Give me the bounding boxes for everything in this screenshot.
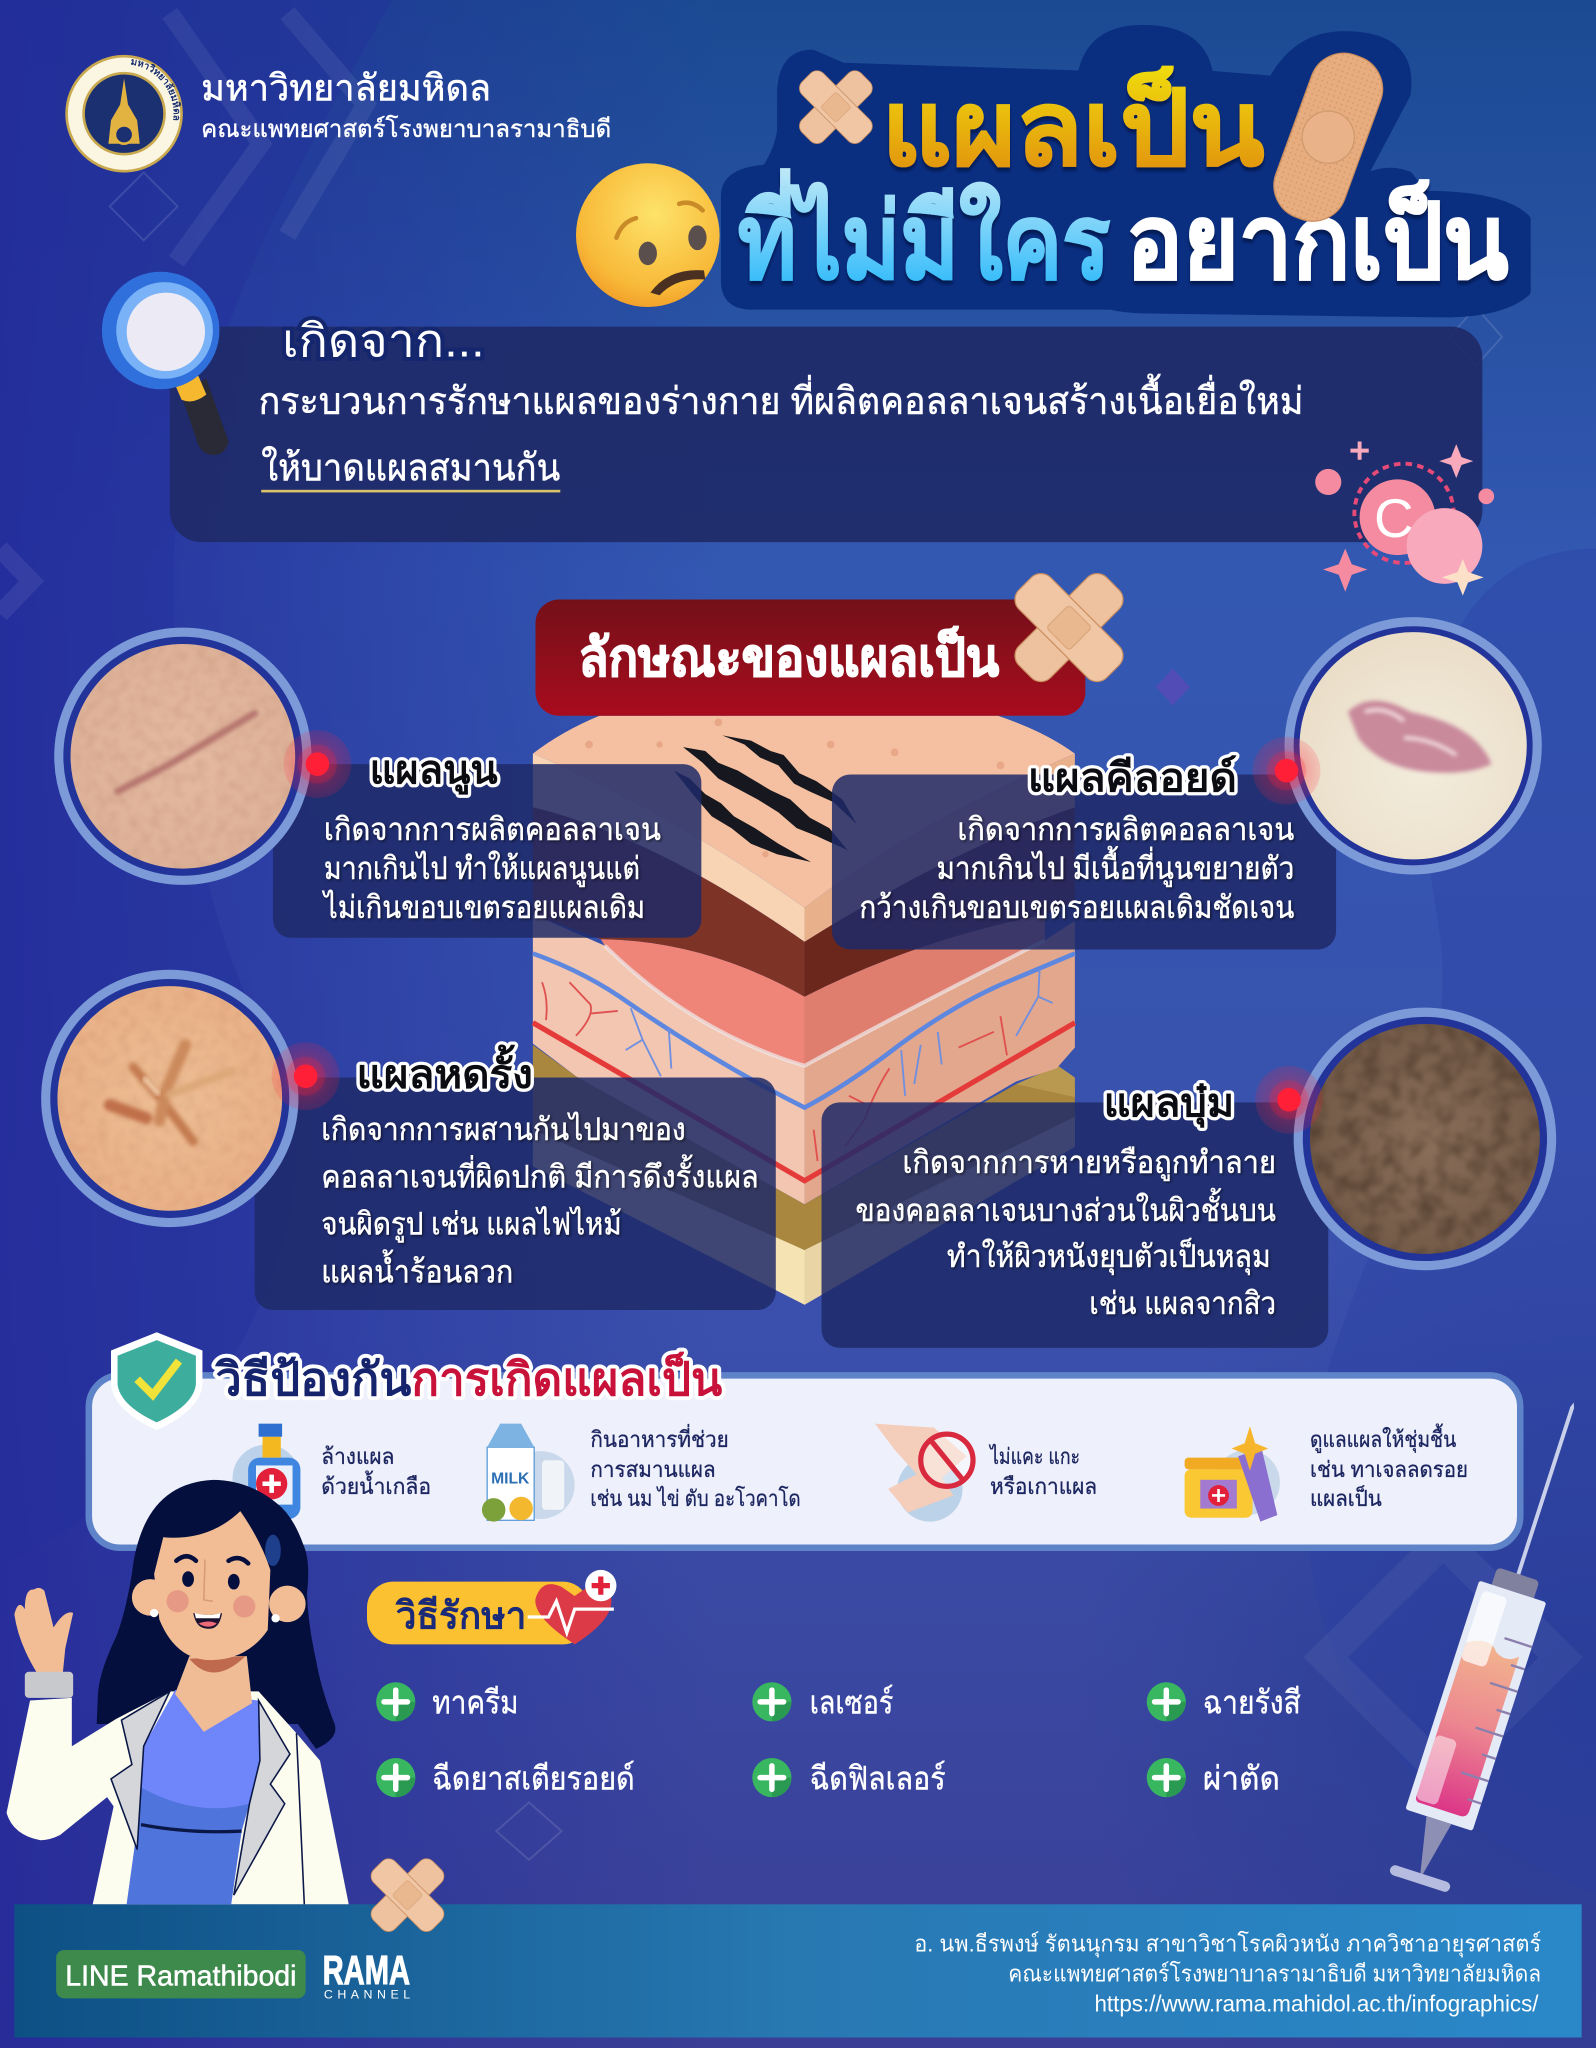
panel: contracture scar: เกิดจากการผสานกันไปมาของ xyxy=(321,1111,686,1147)
cause text line 2: ให้บาดแผลสมานกัน xyxy=(261,447,560,490)
illustration: doctor xyxy=(7,1480,349,1904)
logo: Mahidol University seal: มหาวิทยาลัยมหิดล xyxy=(131,59,181,120)
panel: contracture scar: คอลลาเจนที่ผิดปกติ มีการดึงรั้งแผล xyxy=(321,1153,759,1194)
logo: RAMA channel xyxy=(323,1947,410,2001)
footer credits: https://www.rama.mahidol.ac.th/infographics/ xyxy=(1094,1990,1539,2016)
text: moisturize: ดูแลแผลให้ชุ่มชื้น xyxy=(1310,1423,1456,1453)
hair xyxy=(97,1480,335,1749)
text: food xyxy=(590,1424,801,1511)
logo: RAMA channel: RAMA xyxy=(323,1947,410,1993)
panel: heading characteristics xyxy=(535,600,1085,716)
text: don't pick: หรือเกาแผล xyxy=(990,1474,1097,1499)
text: food: กินอาหารที่ช่วย xyxy=(590,1424,729,1452)
text: don't pick: ไม่แคะ แกะ xyxy=(988,1444,1080,1469)
icon: saline bottle xyxy=(232,1424,300,1519)
ears xyxy=(132,1579,168,1616)
logo: LINE button xyxy=(56,1950,306,1998)
treatment: cream xyxy=(376,1682,519,1721)
treatment: radiation xyxy=(1147,1682,1301,1721)
text: don't pick xyxy=(988,1444,1097,1499)
treatment: laser xyxy=(752,1682,893,1721)
panel: depressed scar: ของคอลลาเจนบางส่วนในผิวชั้นบน xyxy=(855,1187,1276,1228)
footer bar xyxy=(14,1904,1582,2037)
panel: prevention xyxy=(89,1351,1520,1548)
treatment: surgery: ผ่าตัด xyxy=(1203,1759,1280,1796)
text: moisturize: เช่น ทาเจลลดรอย xyxy=(1310,1457,1468,1482)
title line 1: แผลเป็น xyxy=(882,66,1264,188)
icon: milk and food xyxy=(482,1424,575,1522)
panel: keloid xyxy=(832,775,1336,950)
text: wash: ด้วยน้ำเกลือ xyxy=(321,1470,431,1499)
panel: depressed scar xyxy=(822,1102,1328,1348)
shirt xyxy=(127,1690,260,1904)
panel: depressed scar: เกิดจากการหายหรือถูกทำลาย xyxy=(902,1145,1276,1181)
icon: X bandage by title xyxy=(796,67,876,147)
coat xyxy=(7,1691,349,1904)
icon: X bandage bottom xyxy=(367,1855,448,1935)
panel: depressed scar: เช่น แผลจากสิว xyxy=(1089,1286,1276,1321)
heading: raised scar: แผลนูน xyxy=(370,747,498,796)
panel: depressed scar: ทำให้ผิวหนังยุบตัวเป็นหลุม xyxy=(947,1237,1271,1276)
panel: heading characteristics: ลักษณะของแผลเป็น xyxy=(579,626,999,687)
text: moisturize xyxy=(1310,1423,1468,1511)
cause text line 1: กระบวนการรักษาแผลของร่างกาย ที่ผลิตคอลลาเจนสร้างเนื้อเยื่อใหม่ xyxy=(259,373,1303,423)
heading: keloid: แผลคีลอยด์ xyxy=(1028,755,1237,801)
text: food: เช่น นม ไข่ ตับ อะโวคาโด xyxy=(590,1486,801,1511)
icon: sad face emoji xyxy=(576,163,720,307)
treatment: surgery xyxy=(1147,1758,1280,1797)
treatment heading pill: วิธีรักษา xyxy=(395,1596,526,1638)
photo: keloid xyxy=(1289,622,1537,870)
panel: keloid: กว้างเกินขอบเขตรอยแผลเดิมชัดเจน xyxy=(859,890,1294,925)
panel: keloid: มากเกินไป มีเนื้อที่นูนขยายตัว xyxy=(936,845,1294,887)
panel: contracture scar xyxy=(255,1078,776,1310)
treatment: steroid injection xyxy=(376,1758,635,1797)
icon: milk and food: MILK xyxy=(491,1471,530,1488)
treatment heading pill xyxy=(367,1582,589,1644)
lapels xyxy=(111,1691,170,1849)
title line 2 blue: ที่ไม่มีใคร xyxy=(738,169,1110,301)
panel: keloid: เกิดจากการผลิตคอลลาเจน xyxy=(957,812,1294,847)
cause heading: เกิดจาก... xyxy=(282,316,485,367)
treatment: radiation: ฉายรังสี xyxy=(1203,1684,1301,1721)
treatment: laser: เลเซอร์ xyxy=(810,1684,893,1721)
icon: magnifier xyxy=(102,272,229,455)
panel: raised scar: ไม่เกินขอบเขตรอยแผลเดิม xyxy=(321,889,645,925)
faculty name: คณะแพทยศาสตร์โรงพยาบาลรามาธิบดี xyxy=(201,115,611,143)
face xyxy=(154,1511,270,1660)
treatment: filler injection: ฉีดฟิลเลอร์ xyxy=(810,1759,946,1796)
title line 2 white: อยากเป็น xyxy=(1126,179,1508,301)
footer credits: คณะแพทยศาสตร์โรงพยาบาลรามาธิบดี มหาวิทยาลัยมหิดล xyxy=(1008,1960,1541,1986)
treatment list xyxy=(376,1682,1301,1797)
icon: vitamin C: C xyxy=(1374,487,1414,549)
university name: มหาวิทยาลัยมหิดล xyxy=(201,68,491,109)
icon: long bandage xyxy=(1264,44,1392,231)
treatment: steroid injection: ฉีดยาสเตียรอยด์ xyxy=(432,1759,635,1796)
heading: prevention: การเกิดแผลเป็น xyxy=(411,1351,722,1405)
heading: contracture scar: แผลหดรั้ง xyxy=(357,1044,533,1097)
icon: heart with plus xyxy=(528,1570,616,1644)
icon: shield xyxy=(111,1332,202,1430)
neck xyxy=(175,1656,252,1732)
text: food: การสมานแผล xyxy=(590,1457,716,1482)
panel: raised scar: เกิดจากการผลิตคอลลาเจน xyxy=(324,812,661,847)
panel: contracture scar: แผลน้ำร้อนลวก xyxy=(321,1249,513,1290)
logo: RAMA channel: CHANNEL xyxy=(324,1987,410,2001)
footer credits: อ. นพ.ธีรพงษ์ รัตนนุกรม สาขาวิชาโรคผิวหนัง ภาควิชาอายุรศาสตร์ xyxy=(914,1930,1541,1957)
icon: cream and gel xyxy=(1185,1426,1280,1522)
raised hand xyxy=(14,1588,73,1674)
panel: raised scar: มากเกินไป ทำให้แผลนูนแต่ xyxy=(324,850,640,887)
heading: prevention: วิธีป้องกัน xyxy=(214,1354,411,1405)
photo: depressed scar xyxy=(1298,1012,1552,1266)
illustration: syringe xyxy=(1385,1392,1596,1894)
panel: raised scar xyxy=(273,764,701,938)
text: wash: ล้างแผล xyxy=(321,1444,394,1469)
icon: no picking hand xyxy=(875,1424,973,1522)
heading: depressed scar: แผลบุ๋ม xyxy=(1104,1080,1234,1129)
footer credits xyxy=(914,1930,1541,2016)
treatment: cream: ทาครีม xyxy=(432,1684,519,1721)
scratches xyxy=(674,735,857,862)
marker dots xyxy=(272,730,1323,1134)
text: wash xyxy=(321,1444,431,1499)
photo: contracture scar xyxy=(46,974,294,1223)
logo: LINE button: LINE Ramathibodi xyxy=(65,1960,296,1992)
treatment: filler injection xyxy=(752,1758,946,1797)
icon: vitamin C xyxy=(1315,441,1494,596)
heading: prevention xyxy=(214,1351,722,1405)
skin cross-section diagram xyxy=(533,716,1075,1305)
panel: cause xyxy=(170,316,1482,542)
text: moisturize: แผลเป็น xyxy=(1310,1484,1382,1511)
title backing shape xyxy=(726,30,1525,312)
photo: raised scar xyxy=(59,632,307,880)
icon: X bandage heading xyxy=(1009,568,1129,687)
panel: contracture scar: จนผิดรูป เช่น แผลไฟไหม้ xyxy=(321,1205,622,1242)
logo: Mahidol University seal xyxy=(65,54,183,172)
